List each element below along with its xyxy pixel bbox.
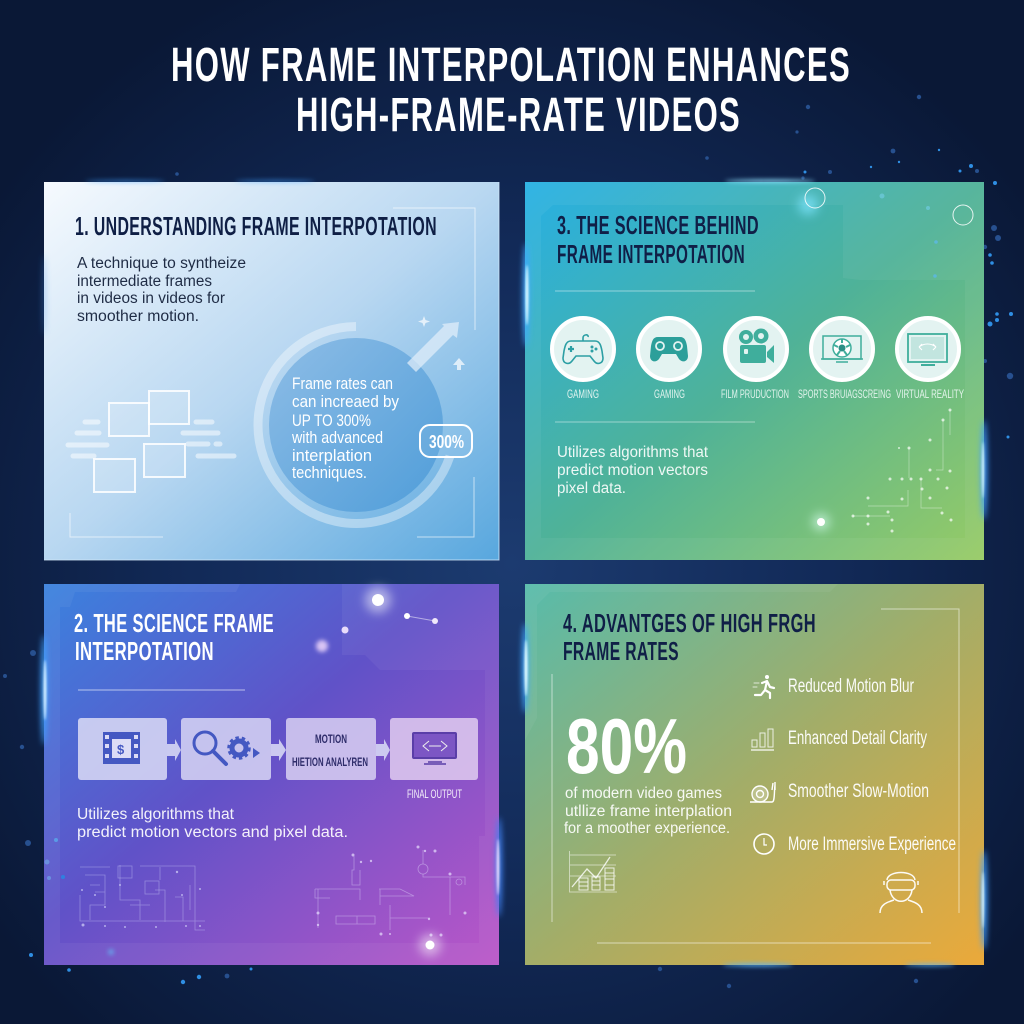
box: motion estimation analysis: HIETION ANALYREN: [292, 755, 368, 769]
chart: 300 percent circle: [258, 326, 450, 523]
panel: understanding frame interpolation: [44, 182, 499, 560]
text block: frame rate stat: with advanced: [291, 428, 383, 447]
box: input video frames: [78, 718, 167, 780]
panel: advantages of high frame rates: [525, 584, 984, 965]
box: search and processing: [181, 718, 271, 780]
label: final output: FINAL OUTPUT: [407, 787, 462, 801]
heading: panel 2: 2. THE SCIENCE FRAME: [74, 608, 274, 638]
icon: sparkles: [418, 316, 465, 370]
labels: use cases: FILM PRUDUCTION: [721, 387, 789, 401]
text block: panel 3 description: pixel data.: [557, 480, 626, 497]
box: motion estimation analysis: [286, 718, 376, 780]
icon: growth arrow: [407, 322, 459, 372]
heading: panel 1: 1. UNDERSTANDING FRAME INTERPOTATION: [75, 211, 437, 241]
label: more immersive experience: More Immersive Experience: [788, 834, 956, 855]
icon: gaming controller solid: [638, 318, 700, 380]
label: enhanced detail clarity: Enhanced Detail Clarity: [788, 728, 927, 749]
text block: panel 3 description: [557, 444, 709, 497]
icon: clock: [754, 834, 774, 854]
text block: 80 percent description: [564, 785, 732, 837]
icon: VR headset person: [880, 872, 922, 913]
heading: panel 2: INTERPOTATION: [75, 636, 214, 666]
labels: use cases: SPORTS BRUIAGSCREING: [798, 387, 891, 401]
heading: panel 3: FRAME INTERPOTATION: [557, 239, 745, 269]
text block: frame rate stat: can increaed by: [292, 392, 399, 411]
text block: panel 1 description: intermediate frames: [77, 273, 212, 290]
text block: panel 1 description: in videos in videos for: [77, 290, 225, 307]
icon: snail: [750, 782, 775, 802]
flow arrows: [167, 739, 390, 761]
corner brackets: [70, 208, 475, 537]
icon: frames with motion lines: [68, 391, 234, 492]
text block: frame rate stat: interplation: [292, 446, 372, 465]
text block: frame rate stat: [291, 374, 399, 482]
text block: panel 1 description: A technique to syntheize: [77, 255, 246, 272]
stat: 80 percent: 80%: [566, 702, 687, 790]
heading: panel 2: [74, 608, 274, 666]
labels: use cases: GAMING: [567, 387, 599, 401]
text block: 80 percent description: for a moother experience.: [564, 820, 730, 837]
decoration: circuit board left: [80, 865, 205, 930]
box: motion estimation analysis: MOTION: [315, 732, 347, 746]
icon: runner: [753, 675, 774, 698]
icon: bars: [751, 729, 774, 750]
text block: frame rate stat: techniques.: [292, 463, 367, 482]
labels: use cases: VIRTUAL REALITY: [896, 387, 964, 401]
text block: panel 3 description: predict motion vectors: [557, 462, 708, 479]
icon: virtual reality monitor: [897, 318, 959, 380]
label: reduced motion blur: Reduced Motion Blur: [788, 676, 914, 697]
text block: frame rate stat: Frame rates can: [292, 374, 393, 393]
heading: panel 3: 3. THE SCIENCE BEHIND: [557, 210, 759, 240]
badge: 300 percent: [420, 425, 472, 457]
icon: growth chart: [570, 851, 617, 892]
text block: panel 1 description: [77, 255, 246, 325]
panel: science behind frame interpolation: [525, 182, 984, 560]
icon: gaming controller outline: [552, 318, 614, 380]
text block: panel 1 description: smoother motion.: [77, 308, 199, 325]
list: advantages: [750, 675, 956, 855]
panel: science frame interpolation process: [44, 584, 499, 965]
decoration: glowing panel edges: [41, 180, 987, 966]
icon: film camera: [725, 318, 787, 380]
labels: use cases: GAMING: [654, 387, 685, 401]
badge: 300 percent: 300%: [429, 432, 464, 452]
label: smoother slow motion: Smoother Slow-Motion: [788, 781, 929, 802]
text block: 80 percent description: of modern video games: [565, 785, 722, 802]
text block: frame rate stat: UP TO 300%: [292, 411, 371, 430]
decoration: glowing rings and lights: [798, 188, 973, 531]
text block: 80 percent description: utllize frame interplation: [565, 803, 732, 820]
text block: panel 2 description: [77, 806, 348, 841]
labels: use cases: [567, 387, 964, 401]
icon: sports broadcasting monitor: [811, 318, 873, 380]
title: HIGH-FRAME-RATE VIDEOS: [296, 89, 741, 142]
heading: panel 4: FRAME RATES: [563, 636, 679, 666]
decoration: circuit dots: [852, 408, 952, 532]
text block: panel 2 description: predict motion vectors and pixel data.: [77, 824, 348, 841]
heading: panel 3: [557, 210, 759, 269]
title: [171, 39, 851, 142]
heading: panel 4: [563, 608, 816, 666]
text block: panel 2 description: Utilizes algorithms that: [77, 806, 235, 823]
box: final output monitor: [390, 718, 478, 780]
text block: panel 3 description: Utilizes algorithms that: [557, 444, 709, 461]
decoration: circuit board right: [315, 846, 466, 936]
decoration: glowing lights: [44, 587, 441, 956]
box: input video frames: $: [117, 742, 125, 757]
heading: panel 4: 4. ADVANTGES OF HIGH FRGH: [563, 608, 816, 638]
